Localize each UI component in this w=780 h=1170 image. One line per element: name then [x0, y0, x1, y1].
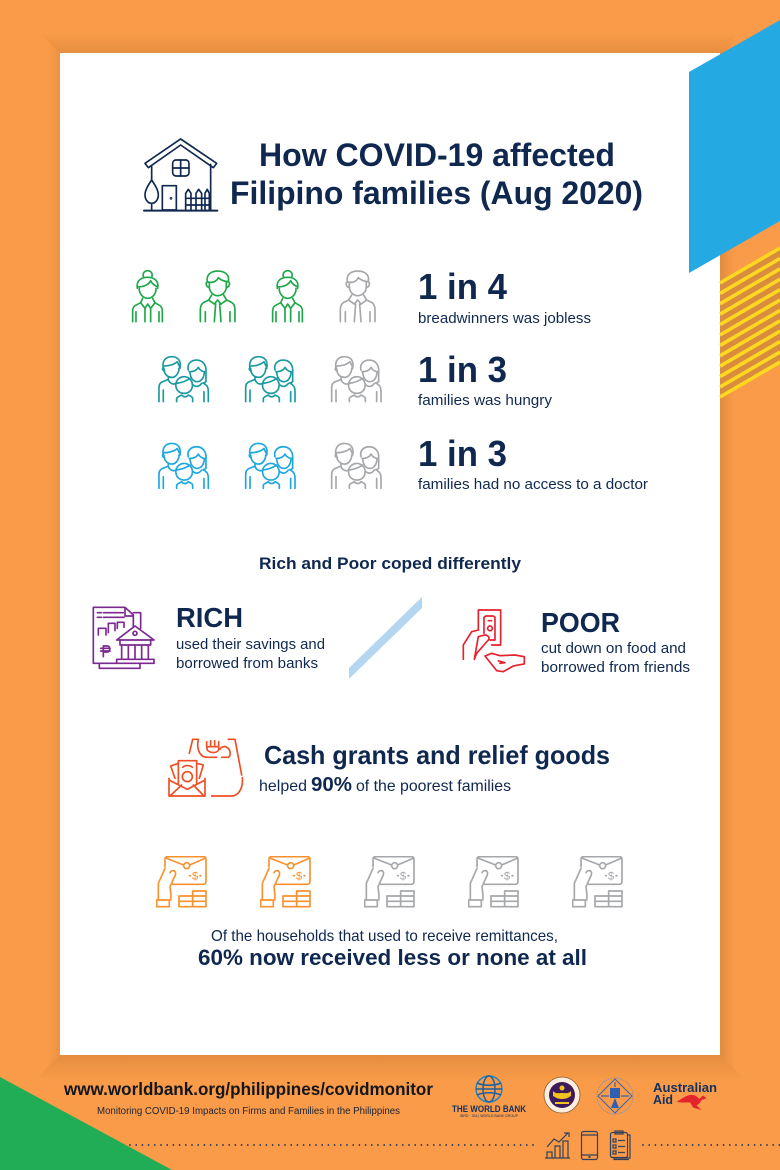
text: poor: cut down on food and [541, 641, 686, 657]
footer url: www.worldbank.org/philippines/covidmonitor [63, 1079, 433, 1099]
stat: 1 in 3 doctor [418, 433, 648, 493]
text: rich: RICH [176, 602, 243, 633]
logo: australian aid: Aid [653, 1093, 673, 1107]
title: How COVID-19 affected [259, 137, 615, 173]
text: rich: used their savings and [176, 637, 325, 653]
icon: phone [582, 1132, 598, 1160]
icon row: remittances [157, 857, 622, 907]
icon: man grey [340, 271, 375, 322]
icon: house [144, 139, 217, 211]
decoration: yellow stripes [720, 248, 780, 397]
logo: australian aid: Australian [653, 1081, 717, 1095]
icon: family grey 2 [332, 443, 381, 488]
icon: man green [200, 271, 235, 322]
icon: rich documents and bank [93, 607, 154, 668]
stat: 1 in 3 hungry: families was hungry [418, 393, 553, 409]
text: poor [541, 607, 690, 676]
stat: 1 in 3 hungry [418, 349, 553, 409]
heading: cash grants: Cash grants and relief goods [264, 740, 610, 770]
decoration: green triangle [0, 1077, 172, 1170]
icon: poor hands and money [463, 610, 524, 672]
stat: 1 in 3 doctor: families had no access to a doctor [418, 477, 648, 493]
icon row: no doctor [159, 443, 381, 488]
divider: light blue slash [349, 597, 422, 679]
icon: woman green 2 [273, 271, 302, 322]
footer dotted line left [130, 1144, 534, 1146]
text: helped 90%: helped [259, 778, 307, 795]
icon: growth chart [545, 1133, 570, 1158]
text: poor: borrowed from friends [541, 660, 690, 676]
logo: world bank [452, 1076, 526, 1118]
footer subtitle: Monitoring COVID-19 Impacts on Firms and Families in the Philippines [97, 1106, 400, 1117]
stat: 1 in 3 doctor: 1 in 3 [418, 433, 507, 474]
logo: world bank: IBRD · IDA | WORLD BANK GROUP [460, 1114, 519, 1118]
icon: remittance grey 1 [365, 857, 414, 907]
title: Filipino families (Aug 2020) [230, 175, 643, 211]
icon: woman green [133, 271, 162, 322]
decoration: blue parallelogram [689, 20, 780, 273]
icon: kangaroo [677, 1095, 707, 1110]
text: helped 90%: of the poorest families [356, 778, 511, 795]
text: poor: POOR [541, 607, 620, 638]
text: rich: borrowed from banks [176, 656, 318, 672]
icon: remittance grey 2 [469, 857, 518, 907]
icon row: hungry families [159, 357, 381, 402]
text: remittance statement: Of the households that used to receive remittances, [211, 928, 558, 945]
icon: cash grants and relief bag [169, 739, 242, 796]
stat: 1 in 4: 1 in 4 [418, 266, 507, 307]
stat: 1 in 4: breadwinners was jobless [418, 311, 591, 327]
icon: remittance orange 2 [261, 857, 310, 907]
footer dotted line right [643, 1144, 780, 1146]
text: remittance statement [198, 928, 587, 970]
panel: white sheet [60, 53, 720, 1055]
text: remittance statement: 60% now received less or none at all [198, 945, 587, 970]
text: rich [176, 602, 325, 672]
stat: 1 in 4 [418, 266, 591, 327]
logo: diamond seal [597, 1078, 633, 1114]
icon: family teal [159, 357, 208, 402]
text: helped 90%: 90% [311, 774, 352, 796]
title [230, 137, 643, 211]
logo: australian aid [653, 1081, 717, 1110]
icon: remittance grey 3 [573, 857, 622, 907]
icon: family blue 2 [246, 443, 295, 488]
text: helped 90% [259, 774, 511, 796]
stat: 1 in 3 hungry: 1 in 3 [418, 349, 507, 390]
icon: remittance orange 1 [157, 857, 206, 907]
logo: round seal [544, 1077, 580, 1113]
logo: world bank: THE WORLD BANK [452, 1104, 526, 1115]
icon: family blue [159, 443, 208, 488]
icon row: breadwinners [133, 271, 375, 322]
heading: rich and poor: Rich and Poor coped differently [259, 554, 522, 573]
icon: family teal 2 [246, 357, 295, 402]
icon: checklist [610, 1131, 630, 1160]
icon: family grey [332, 357, 381, 402]
